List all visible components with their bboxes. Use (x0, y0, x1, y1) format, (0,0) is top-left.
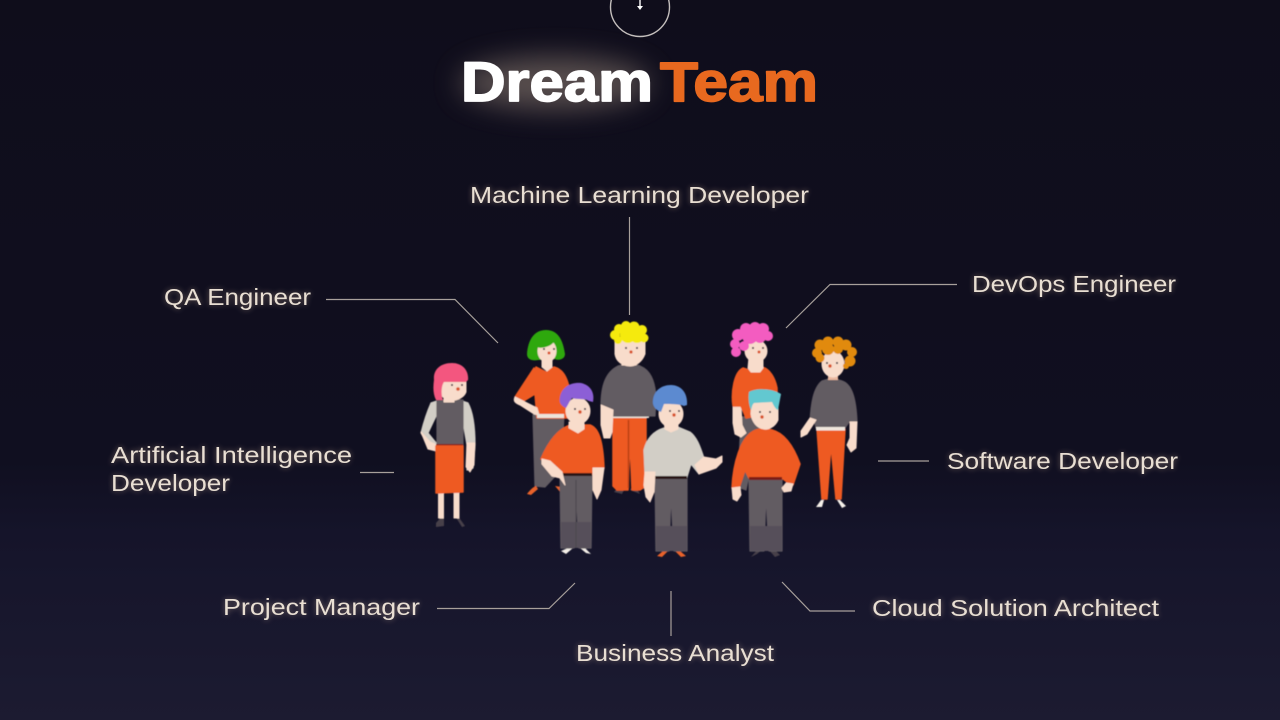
label: Project Manager: Project Manager (223, 594, 420, 620)
label: Software Developer: Software Developer (947, 448, 1178, 474)
team illustration (421, 321, 857, 557)
figure: purple hair, project manager (541, 383, 604, 554)
label: QA Engineer: QA Engineer (164, 284, 311, 310)
title: Dream (461, 50, 653, 113)
figure: cyan hair, cloud solution architect (732, 389, 800, 557)
figure: pink hair, artificial intelligence developer (421, 363, 475, 527)
label: Artificial Intelligence Developer: Developer (111, 470, 230, 496)
label: QA Engineer (164, 284, 498, 343)
label: Machine Learning Developer: Machine Learning Developer (470, 182, 809, 208)
label: Artificial Intelligence Developer: Artificial Intelligence (111, 442, 352, 468)
label: Artificial Intelligence Developer (111, 442, 394, 496)
label: Project Manager (223, 583, 575, 620)
label: DevOps Engineer: DevOps Engineer (972, 271, 1176, 297)
icon: scroll down circle (610, 0, 670, 36)
figure: yellow hair, machine learning developer (601, 321, 656, 494)
label: Business Analyst: Business Analyst (576, 640, 775, 666)
figure: pink afro, DevOps engineer (730, 322, 777, 490)
figure: blue hair, business analyst (644, 385, 722, 557)
figure: orange afro, software developer (801, 336, 857, 508)
title (461, 50, 818, 113)
label: Cloud Solution Architect: Cloud Solution Architect (872, 595, 1160, 621)
title glow (460, 57, 650, 109)
label: DevOps Engineer (786, 271, 1176, 328)
title: Team (660, 50, 818, 113)
figure: green hair, QA engineer (514, 330, 569, 495)
label: Cloud Solution Architect (782, 582, 1160, 621)
